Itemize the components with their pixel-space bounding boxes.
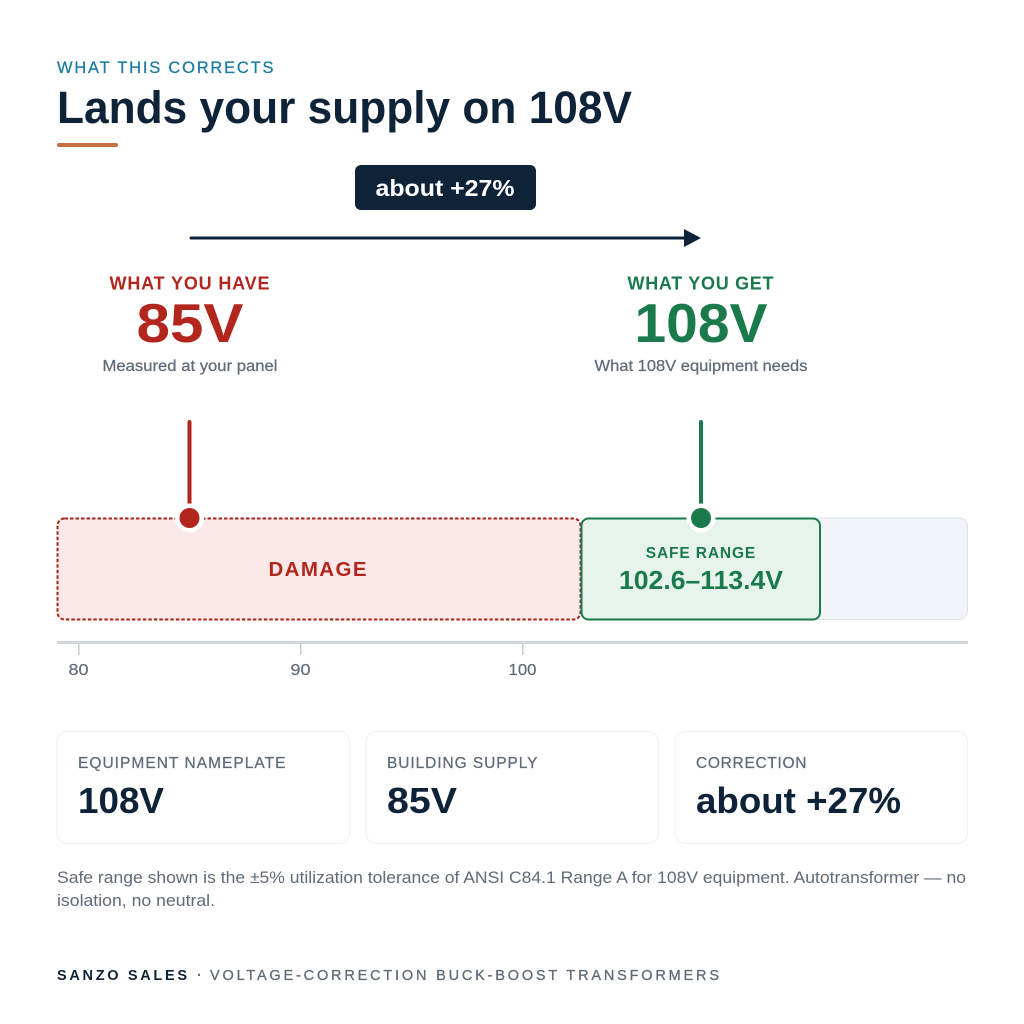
- scale remainder band: [800, 518, 968, 620]
- card: correction: [675, 732, 968, 844]
- callout: what you have: 85V: [136, 292, 244, 354]
- eyebrow: WHAT THIS CORRECTS: [57, 59, 274, 77]
- damage zone: DAMAGE: [268, 558, 366, 581]
- card: building supply: 85V: [387, 780, 457, 821]
- voltage axis: 100: [508, 662, 537, 679]
- callout: what you get: [594, 274, 808, 375]
- brand footer: ·: [197, 968, 202, 984]
- footnote: [57, 869, 966, 910]
- callout: what you have: [102, 274, 278, 375]
- card: correction: about +27%: [696, 780, 901, 821]
- footnote: Safe range shown is the ±5% utilization tolerance of ANSI C84.1 Range A for 108V equipment. Autotransformer — no: [57, 869, 966, 887]
- correction badge: [355, 165, 536, 210]
- card: equipment nameplate: [57, 732, 350, 844]
- voltage axis: 90: [290, 662, 311, 679]
- callout: what you get: 108V: [634, 292, 768, 354]
- card: correction: CORRECTION: [696, 755, 806, 772]
- footnote: isolation, no neutral.: [57, 892, 215, 910]
- brand footer: SANZO SALES: [57, 968, 187, 984]
- safe range zone: SAFE RANGE: [646, 545, 755, 562]
- safe range zone: 102.6–113.4V: [619, 565, 784, 595]
- damage zone: [58, 518, 580, 620]
- callout: what you get: What 108V equipment needs: [594, 358, 808, 375]
- card: building supply: BUILDING SUPPLY: [387, 755, 538, 772]
- title: Lands your supply on 108V: [57, 82, 632, 133]
- safe range zone: [582, 518, 820, 620]
- brand footer: VOLTAGE-CORRECTION BUCK-BOOST TRANSFORMERS: [210, 968, 719, 984]
- callout: what you get: WHAT YOU GET: [628, 274, 774, 294]
- callout: what you have: WHAT YOU HAVE: [110, 274, 270, 294]
- marker: 85V: [175, 422, 204, 532]
- title accent rule: [57, 143, 118, 147]
- arrow from 85V to 108V: [191, 229, 701, 247]
- correction badge: about +27%: [376, 175, 514, 201]
- marker: 108V: [686, 422, 716, 532]
- voltage axis: [57, 641, 968, 679]
- card: equipment nameplate: 108V: [78, 780, 164, 821]
- callout: what you have: Measured at your panel: [102, 358, 278, 375]
- voltage axis: 80: [68, 662, 89, 679]
- card: building supply: [366, 732, 658, 844]
- card: equipment nameplate: EQUIPMENT NAMEPLATE: [78, 755, 286, 772]
